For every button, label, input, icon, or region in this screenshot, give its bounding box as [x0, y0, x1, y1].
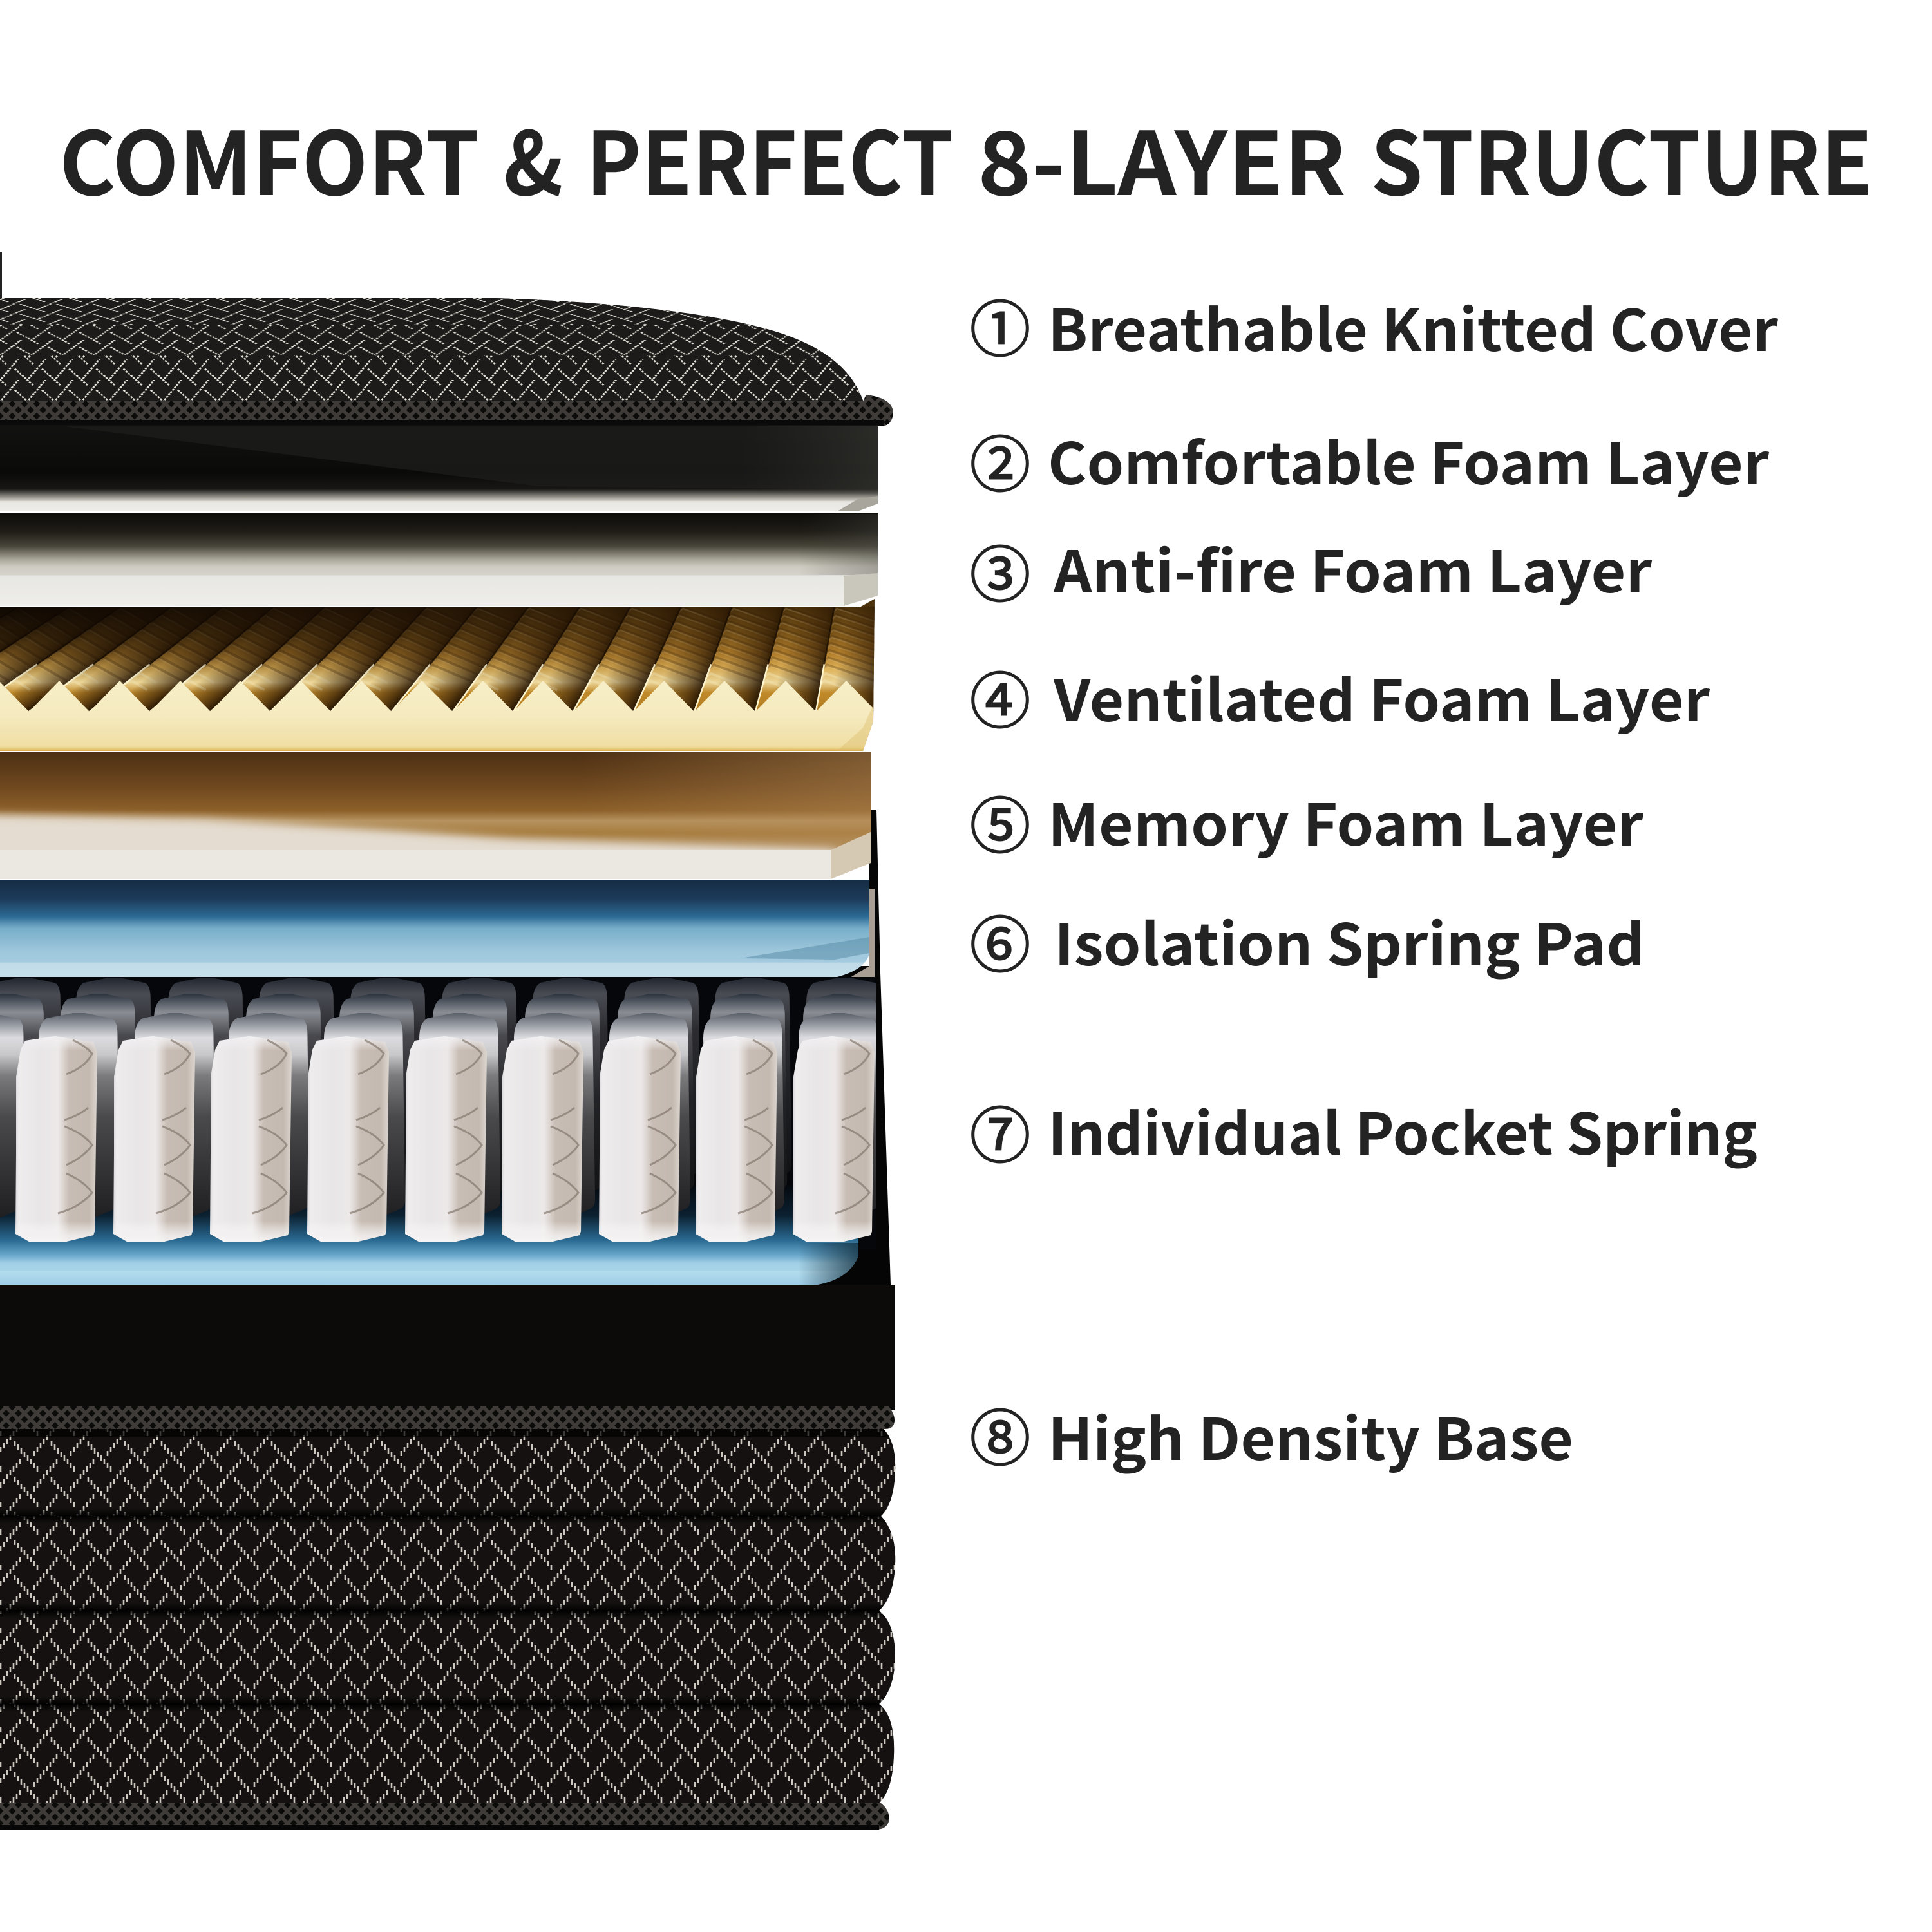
- label 2: Comfortable Foam Layer: [1048, 418, 1769, 501]
- label 1: ①: [970, 281, 1030, 369]
- label 5: ⑤: [970, 778, 1030, 866]
- small black edge mark: [0, 252, 2, 299]
- front row: [0, 1036, 875, 1242]
- layer 2: comfortable foam: [0, 425, 878, 513]
- label 6: ⑥: [970, 897, 1030, 985]
- cream foam teeth: [0, 681, 876, 753]
- black casing behind layers: [0, 810, 895, 1410]
- label 8: ⑧: [970, 1390, 1030, 1478]
- layer 8: quilted panels: [0, 1429, 898, 1830]
- back row 2: [0, 1013, 880, 1220]
- layer 1: breathable knitted cover: [0, 298, 902, 426]
- title: [59, 94, 1873, 221]
- label 8: High Density Base: [1048, 1394, 1573, 1477]
- lower blue pad glow: [0, 1189, 858, 1243]
- layer 5: memory foam: [0, 752, 871, 879]
- label 3: ③: [970, 527, 1030, 614]
- label 6: Isolation Spring Pad: [1054, 899, 1645, 982]
- mattress cross-section: [0, 252, 902, 1830]
- title: PERFECT: [586, 94, 953, 221]
- ridged egg-crate strips: [0, 607, 901, 712]
- layer 8: high density base, black side: [0, 1285, 895, 1429]
- title: &: [504, 94, 563, 221]
- label 7: Individual Pocket Spring: [1048, 1088, 1757, 1171]
- layer 3: anti-fire foam: [0, 513, 878, 606]
- label 3: Anti-fire Foam Layer: [1053, 526, 1652, 609]
- label 1: Breathable Knitted Cover: [1048, 285, 1778, 368]
- title: 8-LAYER: [978, 94, 1346, 221]
- back row 3: [0, 994, 880, 1201]
- label 5: Memory Foam Layer: [1048, 779, 1643, 862]
- dark spring chamber: [850, 977, 875, 983]
- label 2: ②: [970, 417, 1030, 504]
- layer 4: ventilated foam: [0, 599, 901, 753]
- label 4: ④: [970, 653, 1030, 741]
- layer 6: isolation spring pad: [0, 880, 869, 977]
- title: STRUCTURE: [1370, 94, 1873, 221]
- title: COMFORT: [59, 94, 479, 221]
- lower blue support pad: [0, 1243, 858, 1285]
- label 7: ⑦: [970, 1088, 1030, 1175]
- label 4: Ventilated Foam Layer: [1053, 655, 1710, 738]
- side of spring unit beside pad: [837, 889, 875, 985]
- back row 4: [0, 978, 883, 1185]
- layer 7: individual pocket springs: [0, 977, 883, 1249]
